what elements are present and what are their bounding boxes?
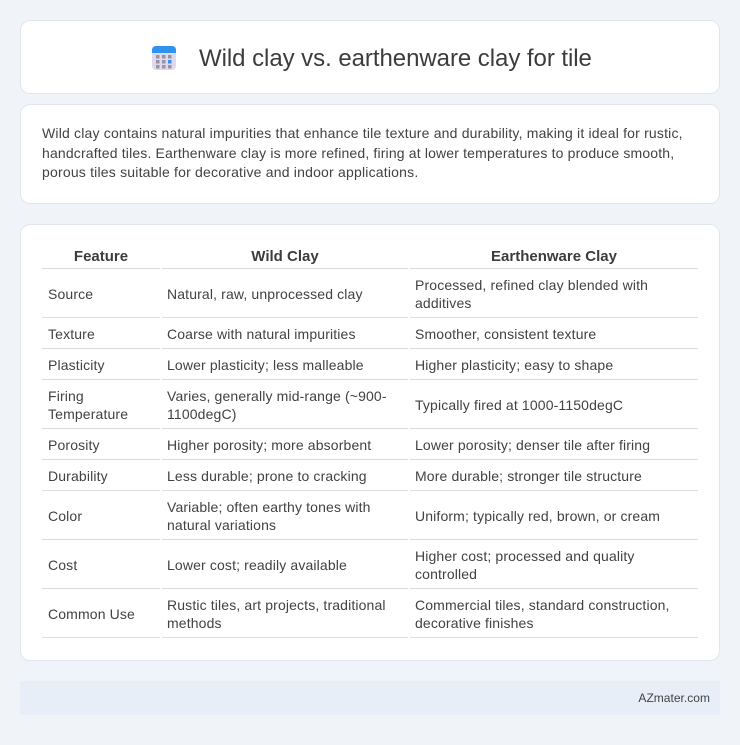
row: porosity: Higher porosity; more absorbent xyxy=(167,437,371,453)
row: durability: Less durable; prone to cracking xyxy=(167,468,367,484)
row: firing temperature: 1100degC) xyxy=(167,406,236,422)
row: color: Variable; often earthy tones with xyxy=(167,499,371,515)
row: porosity xyxy=(48,437,650,453)
header: feature: Feature xyxy=(74,248,128,265)
row: porosity: Porosity xyxy=(48,437,100,453)
row: color: Uniform; typically red, brown, or cream xyxy=(415,508,660,524)
row: common use: Common Use xyxy=(48,606,135,622)
row: source xyxy=(48,277,648,311)
icon: calendar xyxy=(152,46,176,70)
intro text: handcrafted tiles. Earthenware clay is more refined, firing at lower temperatures to produce smooth, xyxy=(42,144,674,160)
table panel xyxy=(20,224,720,661)
row: cost: Higher cost; processed and quality xyxy=(415,548,635,564)
row: plasticity: Lower plasticity; less malleable xyxy=(167,357,364,373)
row: firing temperature: Firing xyxy=(48,388,84,404)
intro text: porous tiles suitable for decorative and indoor applications. xyxy=(42,164,418,180)
row: cost: Cost xyxy=(48,557,77,573)
row: firing temperature xyxy=(48,388,623,422)
row: source: Source xyxy=(48,286,93,302)
intro text: Wild clay contains natural impurities that enhance tile texture and durability, making it ideal for rustic, xyxy=(42,125,683,141)
row: color: natural variations xyxy=(167,517,276,533)
row: firing temperature: Temperature xyxy=(48,406,128,422)
row: plasticity: Plasticity xyxy=(48,357,105,373)
row: source: Natural, raw, unprocessed clay xyxy=(167,286,363,302)
row: source: Processed, refined clay blended with xyxy=(415,277,648,293)
row: source: additives xyxy=(415,295,472,311)
row: durability: More durable; stronger tile structure xyxy=(415,468,642,484)
row: common use: Commercial tiles, standard construction, xyxy=(415,597,670,613)
row: porosity: Lower porosity; denser tile after firing xyxy=(415,437,650,453)
row: firing temperature: Typically fired at 1000-1150degC xyxy=(415,397,623,413)
row: color xyxy=(48,499,660,533)
row: cost: Lower cost; readily available xyxy=(167,557,347,573)
header: earthenware clay: Earthenware Clay xyxy=(491,248,617,265)
row: common use xyxy=(48,597,670,631)
title panel xyxy=(20,20,720,94)
row: durability xyxy=(48,468,642,484)
row: texture xyxy=(48,326,596,342)
header: wild clay: Wild Clay xyxy=(251,248,319,265)
row: color: Color xyxy=(48,508,82,524)
row: cost xyxy=(48,548,635,582)
row: common use: Rustic tiles, art projects, traditional xyxy=(167,597,386,613)
row: firing temperature: Varies, generally mid-range (~900- xyxy=(167,388,387,404)
title: Wild clay vs. earthenware clay for tile xyxy=(199,45,592,72)
intro text xyxy=(42,125,683,180)
footer credit: AZmater.com xyxy=(638,691,710,705)
row: durability: Durability xyxy=(48,468,108,484)
row: texture: Texture xyxy=(48,326,95,342)
row: common use: methods xyxy=(167,615,222,631)
row: texture: Smoother, consistent texture xyxy=(415,326,596,342)
row: cost: controlled xyxy=(415,566,477,582)
footer bar xyxy=(20,681,720,715)
row: common use: decorative finishes xyxy=(415,615,534,631)
intro panel xyxy=(20,104,720,204)
row: plasticity xyxy=(48,357,613,373)
row: texture: Coarse with natural impurities xyxy=(167,326,356,342)
row: plasticity: Higher plasticity; easy to shape xyxy=(415,357,613,373)
